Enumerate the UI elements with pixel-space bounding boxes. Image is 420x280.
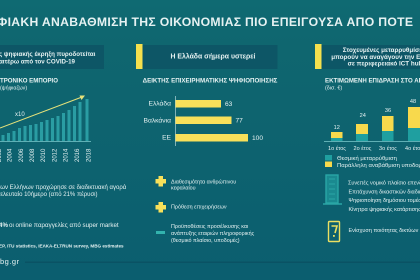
- text: legal and digital measures: Ψηφιοποίηση δημόσιου τομέα: [348, 197, 420, 204]
- panel: right column GDP impact: [315, 44, 420, 242]
- text: network quality: Ενίσχυση ποιότητας δικτύων: [348, 227, 419, 234]
- bar chart: GDP impact: 24: [360, 113, 366, 119]
- legend: Θεσμική μεταρρύθμιση: [337, 155, 397, 162]
- label: x10: x10: [15, 112, 25, 118]
- text: legal and digital measures: Κίνητρα ψηφιακής κατάρτισης: [348, 206, 420, 213]
- bar chart: digitisation index: Βαλκάνια: [144, 116, 171, 124]
- axis years: 2006: [19, 148, 25, 162]
- axis years: 2014: [64, 148, 70, 162]
- bar chart: GDP impact: 48: [410, 99, 416, 105]
- bar chart: digitisation index: ΕΕ: [162, 134, 172, 142]
- chart heading: ΔΕΙΚΤΗΣ ΕΠΙΧΕΙΡΗΜΑΤΙΚΗΣ ΨΗΦΙΟΠΟΙΗΣΗΣ: [143, 78, 278, 84]
- panel: middle column Greece lags: [136, 44, 278, 244]
- bar chart: GDP impact: 12: [334, 125, 340, 131]
- chart heading: (ψήφιαζων): [0, 84, 27, 92]
- text: preconditions: [171, 223, 255, 244]
- accent bar: [136, 44, 142, 69]
- arrow: x10 growth: [0, 96, 85, 128]
- text: preconditions: Προϋποθέσεις προσέλκυσης και: [171, 223, 249, 230]
- bar chart: GDP impact: 2ο έτος: [354, 145, 372, 152]
- text: sources: EP, ITU statistics, ΙΕΛΚΑ-ELTRUN survey, MBG estimates: [0, 244, 124, 248]
- chart heading: (δισ. €): [325, 86, 342, 92]
- bar chart: GDP impact: 36: [385, 108, 391, 114]
- heading box: digital explosion: ς ψηφιακής έκρηξη πυροδοτείται: [0, 51, 96, 58]
- text: survey note: των Ελλήνων προχώρησε σε διαδικτυακή αγορά: [0, 184, 127, 191]
- bar chart: digitisation index: 100: [252, 135, 263, 142]
- accent bar: [315, 44, 322, 69]
- icon: minus: [156, 231, 165, 234]
- heading box: digital explosion: [0, 45, 104, 69]
- footer: site name and rule: bg.gr: [0, 257, 20, 266]
- bar chart: e-commerce growth: [0, 96, 92, 162]
- axis years: 2008: [30, 148, 36, 162]
- bar chart: GDP impact: 1ο έτος: [328, 145, 346, 152]
- heading box: digital explosion: αιτέρω από τον COVID-19: [0, 58, 76, 66]
- axis years: [0, 148, 92, 162]
- heading box: Η Ελλάδα σήμερα υστερεί: [171, 52, 256, 60]
- text: preconditions: (θεσμικό πλαίσιο, υποδομές): [171, 237, 240, 244]
- chart heading: [0, 78, 58, 92]
- text: human capital: Διαθεσιμότητα ανθρώπινου: [171, 178, 236, 185]
- chart heading: [325, 78, 420, 92]
- icon: plus: [156, 202, 166, 212]
- axis years: 2004: [8, 148, 14, 162]
- text: human capital: [171, 178, 236, 192]
- chart heading: ΤΡΟΝΙΚΟ ΕΜΠΟΡΙΟ: [0, 78, 58, 84]
- text: survey note: τελευταίο 10ήμερο (από 21% πέρυσι): [0, 191, 97, 198]
- bar chart: GDP impact: [324, 99, 420, 152]
- bar chart: digitisation index: Ελλάδα: [148, 100, 171, 108]
- bar chart: digitisation index: 77: [236, 118, 243, 124]
- axis years: 2016: [75, 148, 81, 162]
- heading box: [322, 45, 420, 69]
- axis years: 2018: [86, 148, 92, 162]
- bar chart: GDP impact: 3ο έτος: [379, 145, 397, 152]
- icon: plus: [156, 176, 166, 186]
- icon: legal scroll: [323, 175, 342, 204]
- bar chart: digitisation index: 63: [225, 101, 233, 108]
- legend: [325, 155, 420, 169]
- bar chart: digitisation index: [144, 96, 263, 146]
- text: preconditions: ανάπτυξης εταιριών πληροφορικής: [171, 230, 255, 237]
- icon: mobile phone: [328, 222, 340, 242]
- text: legal and digital measures: [348, 180, 420, 213]
- text: online orders: οι online παραγγελίες από super market: [9, 222, 119, 229]
- text: survey note: [0, 184, 127, 198]
- text: business intent: Πρόθεση επιχειρήσεων: [171, 204, 227, 210]
- panel: left column e-commerce: [0, 45, 127, 248]
- axis years: 2010: [41, 148, 47, 162]
- axis years: 2012: [52, 148, 58, 162]
- heading box: [142, 45, 278, 69]
- text: human capital: κεφαλαίου: [171, 186, 196, 192]
